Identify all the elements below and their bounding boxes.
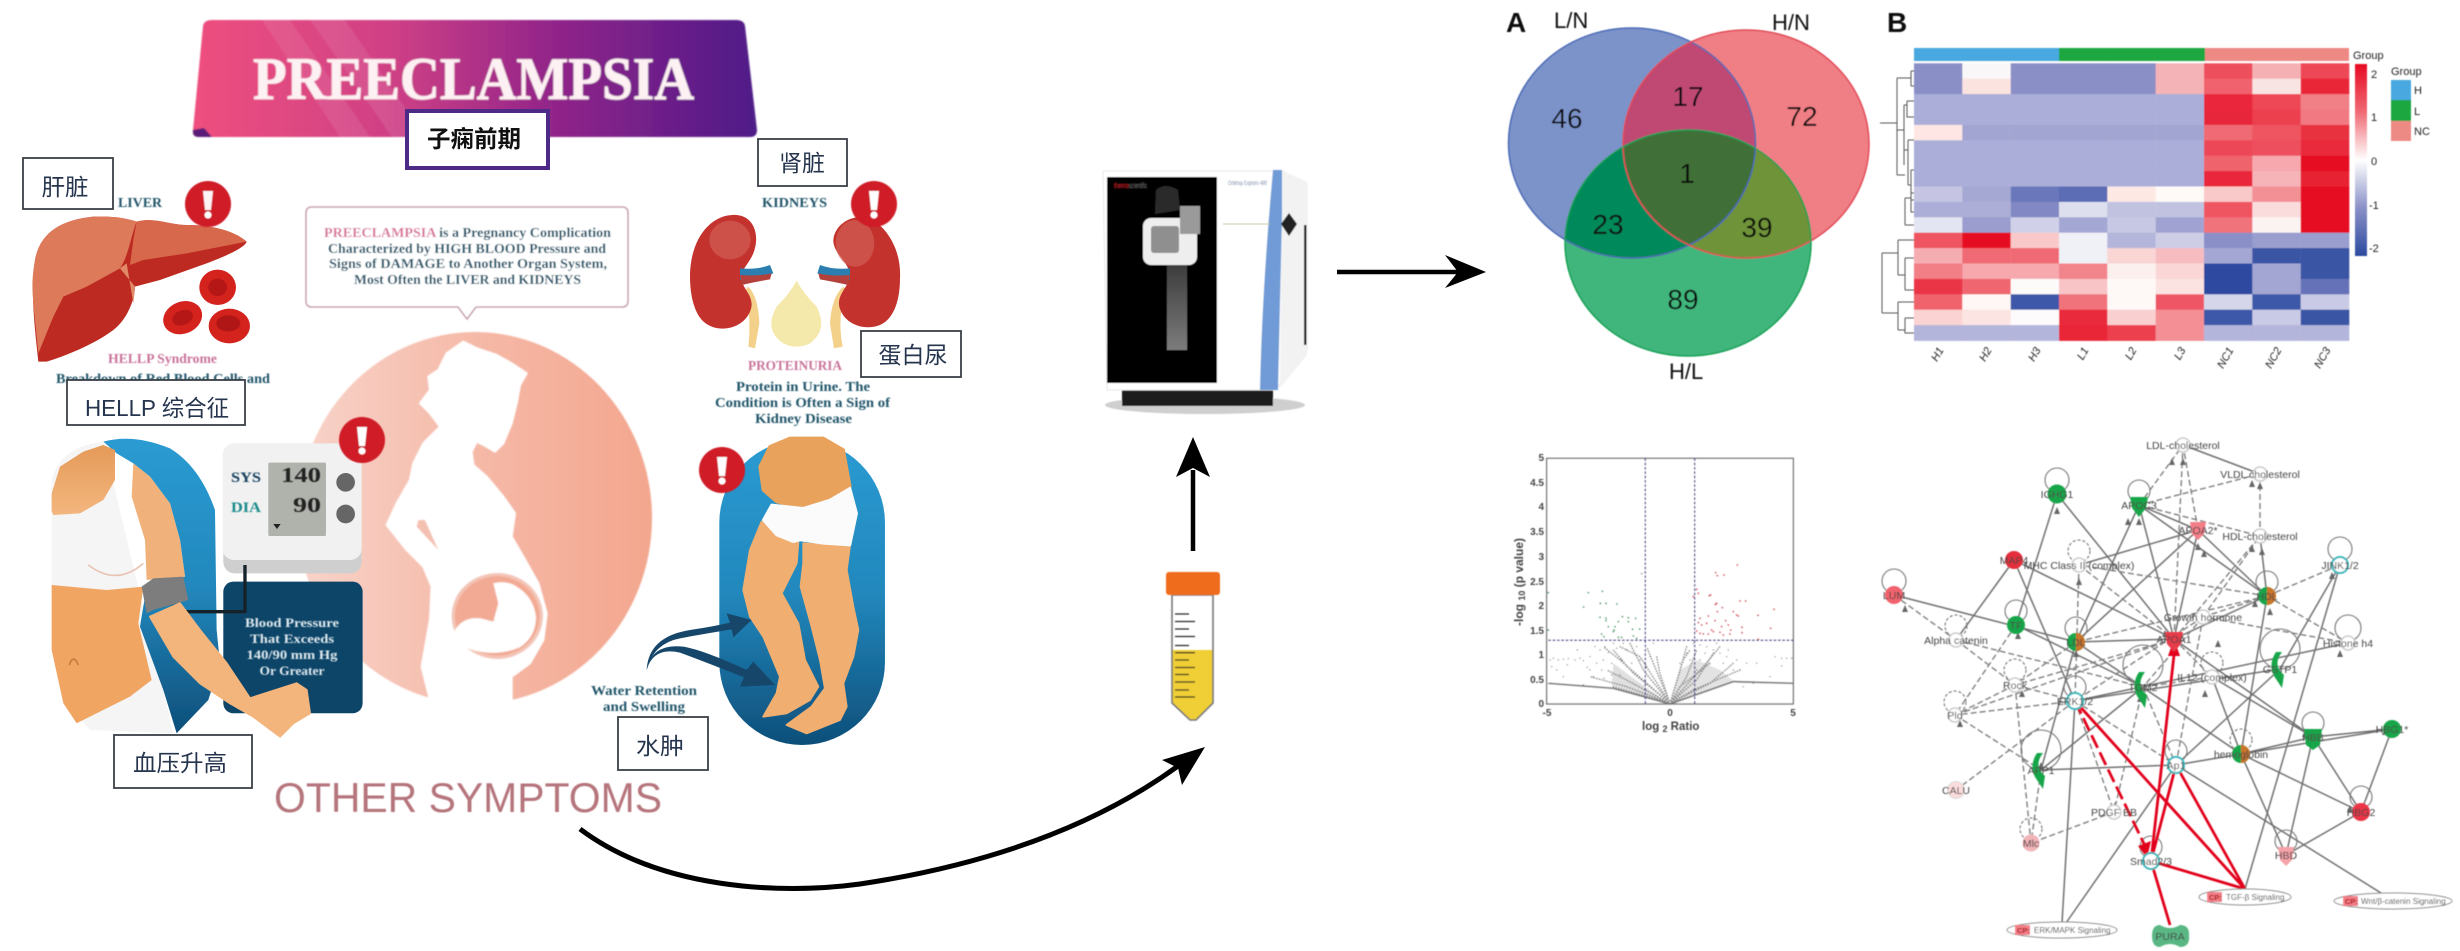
Venn counts: 39 — [1741, 212, 1773, 243]
panel: central pregnant figure — [298, 332, 652, 713]
label: high blood pressure: 血压升高 — [133, 750, 227, 776]
proteinuria description — [715, 380, 890, 427]
label: HELLP syndrome — [67, 380, 245, 425]
y-axis tick labels — [1530, 453, 1544, 710]
callout: definition: Most Often the LIVER and KIDNEYS — [354, 272, 581, 287]
Venn set labels: H/L — [1669, 359, 1703, 384]
y-axis tick labels: 1.5 — [1530, 626, 1544, 637]
network node labels: IL12 (complex) — [2177, 672, 2247, 684]
network node labels: HDL — [2256, 591, 2278, 603]
label: kidneys: 肾脏 — [779, 150, 825, 176]
network node labels: LUM — [1883, 590, 1905, 602]
panel A: Venn diagram — [1506, 7, 1869, 384]
network node labels: hemoglobin — [2214, 749, 2268, 761]
Venn circles — [1508, 28, 1869, 356]
Venn set labels: H/N — [1772, 10, 1810, 35]
network node labels: HBD — [2275, 850, 2298, 862]
network node labels: HBG2 — [2347, 807, 2375, 819]
canonical pathway: TGF-β signaling: CP: — [2209, 893, 2222, 902]
heatmap sample labels: L3 — [2172, 345, 2189, 362]
liver organ illustration — [32, 217, 250, 362]
Venn counts: 23 — [1592, 209, 1624, 240]
callout: definition: Signs of DAMAGE to Another Organ System, — [329, 256, 607, 271]
y-axis title: -log — [1512, 604, 1526, 626]
Venn set labels: L/N — [1554, 8, 1588, 33]
label: HELLP syndrome: HELLP 综合征 — [85, 395, 229, 421]
heatmap sample labels: NC1 — [2215, 346, 2237, 371]
icon: urine sample tube — [1166, 572, 1220, 720]
group annotation bar: Group — [2353, 50, 2384, 62]
y-axis tick labels: 1 — [1538, 650, 1544, 661]
y-axis tick labels: 4 — [1538, 502, 1544, 513]
dashed edges — [1894, 445, 2348, 843]
legs illustration — [647, 438, 885, 745]
label: swelling — [618, 717, 708, 770]
plot data — [1547, 458, 1793, 704]
network node labels: MHC Class II (complex) — [2024, 560, 2134, 572]
kidneys illustration — [690, 215, 900, 348]
heatmap sample labels: H2 — [1977, 346, 1995, 364]
label: proteinuria — [861, 331, 961, 377]
proteinuria description: Condition is Often a Sign of — [715, 396, 890, 411]
canonical pathway: Wnt/β-catenin signaling — [2334, 893, 2452, 909]
icon: liver alert — [185, 181, 231, 227]
edge arrowheads — [1902, 458, 2388, 845]
y-axis title: (p value) — [1512, 538, 1526, 591]
pregnant woman silhouette — [387, 342, 547, 713]
kidneys heading: KIDNEYS — [762, 196, 827, 211]
heatmap sample labels: NC3 — [2312, 345, 2334, 371]
network node labels: Pld — [1947, 710, 1963, 722]
network node labels: Alpha catenin — [1924, 635, 1988, 647]
proteinuria description: Protein in Urine. The — [736, 380, 870, 395]
blood pressure caption: Blood Pressure — [245, 615, 339, 630]
label: swelling: 水肿 — [636, 733, 684, 759]
panel B: heatmap — [1880, 7, 2430, 371]
network node labels: JINK1/2 — [2321, 560, 2359, 572]
Venn set labels — [1554, 8, 1810, 384]
icon: mass spectrometer: Orbitrap Exploris 480 — [1228, 180, 1267, 187]
Venn counts: 1 — [1679, 158, 1695, 189]
colour scale: 1 — [2371, 112, 2377, 124]
group legend: Group — [2391, 66, 2422, 78]
panel: kidneys — [690, 139, 961, 427]
network node labels: ERK1/2 — [2057, 696, 2093, 708]
Venn counts: 17 — [1672, 81, 1704, 112]
icon: blood pressure alert — [339, 417, 385, 463]
swelling caption — [591, 683, 698, 714]
canonical pathway: ERK/MAPK signaling: CP: — [2017, 926, 2030, 935]
canonical pathway: TGF-β signaling: TGF-β Signaling — [2226, 893, 2284, 902]
x-axis tick labels: 5 — [1790, 708, 1796, 719]
network node labels: APP1 — [2028, 765, 2055, 777]
canonical pathway: Wnt/β-catenin signaling: Wnt/β-catenin Signaling — [2361, 897, 2446, 906]
red highlighted edges — [2075, 639, 2245, 925]
network node labels: HBB — [2302, 732, 2324, 744]
Chinese title label — [407, 111, 548, 168]
icon: mass spectrometer: thermoscientific — [1114, 181, 1147, 190]
blood pressure readout: 90 — [293, 493, 321, 517]
heatmap sample labels: H1 — [1929, 346, 1947, 364]
canonical pathway: TGF-β signaling — [2199, 889, 2291, 905]
callout: definition: Characterized by HIGH BLOOD Pressure and — [328, 241, 606, 256]
network node labels: GSTP1 — [2263, 664, 2297, 676]
y-axis tick labels: 3 — [1538, 552, 1544, 563]
arm and torso illustration — [52, 439, 363, 737]
group legend: L — [2414, 106, 2420, 118]
network node labels: CALU — [1942, 785, 1970, 797]
y-axis tick labels: 2.5 — [1530, 577, 1544, 588]
colour scale: -2 — [2369, 243, 2379, 255]
network node labels: HBG1* — [2376, 724, 2408, 736]
liver heading: LIVER — [118, 196, 163, 211]
network nodes — [1885, 438, 2401, 869]
x-axis title: log — [1642, 721, 1659, 733]
network node labels: Ap1 — [2167, 760, 2185, 772]
blood pressure readout — [231, 463, 321, 517]
x-axis tick labels — [1543, 708, 1796, 719]
y-axis tick labels: 5 — [1538, 453, 1544, 464]
title banner: PREECLAMPSIA: PREECLAMPSIA — [253, 46, 694, 112]
proteinuria heading: PROTEINURIA — [748, 359, 843, 374]
blood pressure caption: Or Greater — [260, 663, 325, 678]
colour scale — [2355, 64, 2379, 256]
blood pressure readout: SYS — [231, 470, 261, 486]
icon: swelling alert — [699, 447, 745, 493]
network node labels: Rock — [2003, 680, 2028, 692]
y-axis tick labels: 2 — [1538, 601, 1544, 612]
self loops — [1882, 468, 2372, 858]
heatmap sample labels: NC2 — [2263, 346, 2285, 371]
canonical pathway: ERK/MAPK signaling — [2007, 922, 2117, 938]
group legend: NC — [2414, 126, 2430, 138]
swelling caption: and Swelling — [603, 699, 685, 714]
label: liver: 肝脏 — [42, 174, 88, 200]
network node labels — [1883, 440, 2408, 868]
heatmap cells — [1914, 63, 2349, 341]
label: liver — [23, 158, 113, 209]
HELLP syndrome heading: HELLP Syndrome — [108, 352, 217, 367]
network node labels: LDL-cholesterol — [2146, 440, 2220, 452]
title banner: PREECLAMPSIA — [193, 20, 757, 137]
node: PURA — [2152, 925, 2189, 947]
group annotation bar — [1914, 48, 2384, 62]
heatmap sample labels: L2 — [2123, 346, 2140, 362]
label: high blood pressure — [114, 735, 252, 788]
arrow: curved arrow to sample tube — [580, 747, 1205, 888]
canonical pathway: ERK/MAPK signaling: ERK/MAPK Signaling — [2034, 926, 2110, 935]
label: proteinuria: 蛋白尿 — [878, 342, 948, 368]
blood pressure caption — [245, 615, 339, 678]
group legend: H — [2414, 85, 2422, 97]
x-axis tick labels: -5 — [1543, 708, 1552, 719]
arrow: spectrometer to results — [1337, 255, 1486, 288]
y-axis tick labels: 4.5 — [1530, 478, 1544, 489]
blood pressure caption: 140/90 mm Hg — [246, 647, 338, 662]
network node labels: Histone h4 — [2323, 638, 2373, 650]
panel: swelling legs — [591, 438, 885, 770]
network node labels: APOA1 — [2156, 634, 2192, 646]
network node labels: Growth hormone — [2164, 612, 2242, 624]
network node labels: Mlc — [2023, 838, 2039, 850]
canonical pathway: Wnt/β-catenin signaling: CP: — [2345, 897, 2358, 906]
Venn counts: 72 — [1786, 101, 1818, 132]
callout: definition — [306, 207, 628, 319]
blood pressure caption: That Exceeds — [250, 631, 334, 646]
x-axis tick labels: 0 — [1667, 708, 1673, 719]
colour scale: -1 — [2369, 200, 2379, 212]
proteinuria description: Kidney Disease — [755, 412, 852, 427]
icon: kidney alert — [851, 181, 897, 227]
panel: liver — [23, 158, 270, 425]
Chinese title label: 子痫前期 — [427, 126, 521, 152]
Venn counts: 46 — [1551, 103, 1583, 134]
group legend — [2391, 66, 2430, 141]
dendrogram — [1880, 71, 1914, 333]
swelling caption: Water Retention — [591, 683, 698, 698]
panel letter B: B — [1887, 7, 1907, 38]
network node labels: PDGF BB — [2091, 807, 2137, 819]
y-axis tick labels: 3.5 — [1530, 527, 1544, 538]
label: kidneys — [758, 139, 847, 186]
network node labels: HDL-cholesterol — [2222, 531, 2298, 543]
node: PURA: PURA — [2155, 931, 2185, 943]
network node labels: TGM2 — [2128, 682, 2158, 694]
HELLP description: Breakdown of Red Blood Cells and — [56, 372, 270, 387]
blood pressure readout: DIA — [231, 500, 261, 516]
callout: definition: PREECLAMPSIA is a Pregnancy Complication — [324, 225, 612, 240]
panel: protein interaction network — [1882, 438, 2452, 947]
heatmap sample labels: H3 — [2026, 345, 2044, 364]
network node labels: Smad2/3 — [2130, 856, 2172, 868]
y-axis tick labels: 0 — [1538, 699, 1544, 710]
other symptoms heading: OTHER SYMPTOMS — [274, 774, 662, 821]
network node labels: APOA2* — [2178, 525, 2218, 537]
x-axis title: Ratio — [1667, 721, 1699, 733]
Venn counts — [1551, 81, 1818, 315]
y-axis title: 10 — [1517, 591, 1527, 601]
panel: high blood pressure — [52, 417, 385, 788]
colour scale: 0 — [2371, 156, 2377, 168]
salmon circle — [298, 332, 652, 704]
blood pressure readout: 140 — [281, 463, 321, 487]
network node labels: APOC3 — [2121, 500, 2157, 512]
Venn counts: 89 — [1667, 284, 1699, 315]
network node labels: TF — [2010, 620, 2022, 632]
arrow: tube to mass spectrometer — [1176, 437, 1210, 551]
network node labels: IGHG1 — [2041, 489, 2073, 501]
x-axis title: 2 — [1662, 724, 1667, 734]
network node labels: MAP4 — [2000, 555, 2028, 567]
heatmap sample labels: L1 — [2075, 346, 2092, 362]
y-axis tick labels: 0.5 — [1530, 675, 1544, 686]
heatmap sample labels — [1929, 345, 2334, 371]
network node labels: LDL — [2066, 637, 2086, 649]
panel: volcano plot — [1512, 453, 1796, 734]
network node labels: VLDL cholesterol — [2220, 469, 2300, 481]
colour scale: 2 — [2371, 69, 2377, 81]
solid edges — [1894, 445, 2392, 923]
panel letter A: A — [1506, 7, 1526, 38]
icon: mass spectrometer — [1103, 170, 1307, 414]
